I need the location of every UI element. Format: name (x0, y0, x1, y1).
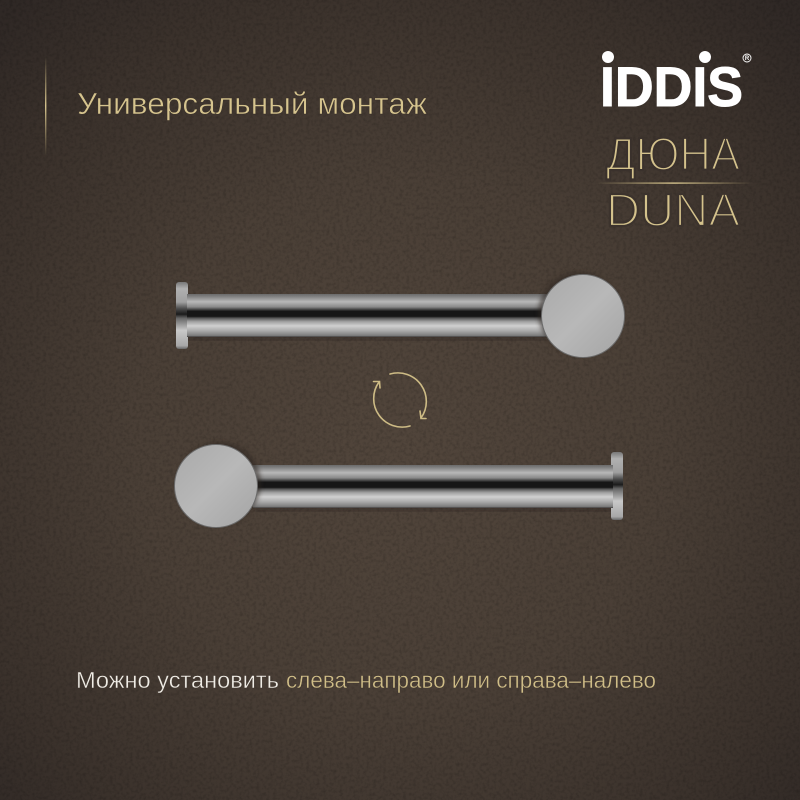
towel rail: top, disc on the right (176, 272, 624, 358)
icon: rotate arrows (374, 373, 426, 427)
caption: слева–направо или справа–налево (286, 667, 656, 693)
series name: Дюна / Duna (595, 128, 753, 236)
logo: IDDIS: IDDIS (600, 55, 743, 118)
towel rail: bottom, disc on the left (174, 442, 623, 528)
series name: Дюна / Duna: DUNA (606, 184, 740, 236)
caption: Можно установить (76, 667, 279, 693)
logo: IDDIS: R (745, 56, 750, 62)
caption (76, 667, 656, 693)
series name: Дюна / Duna: ДЮНА (606, 128, 740, 180)
title: Универсальный монтаж (77, 86, 427, 121)
vertical accent line (45, 56, 46, 156)
